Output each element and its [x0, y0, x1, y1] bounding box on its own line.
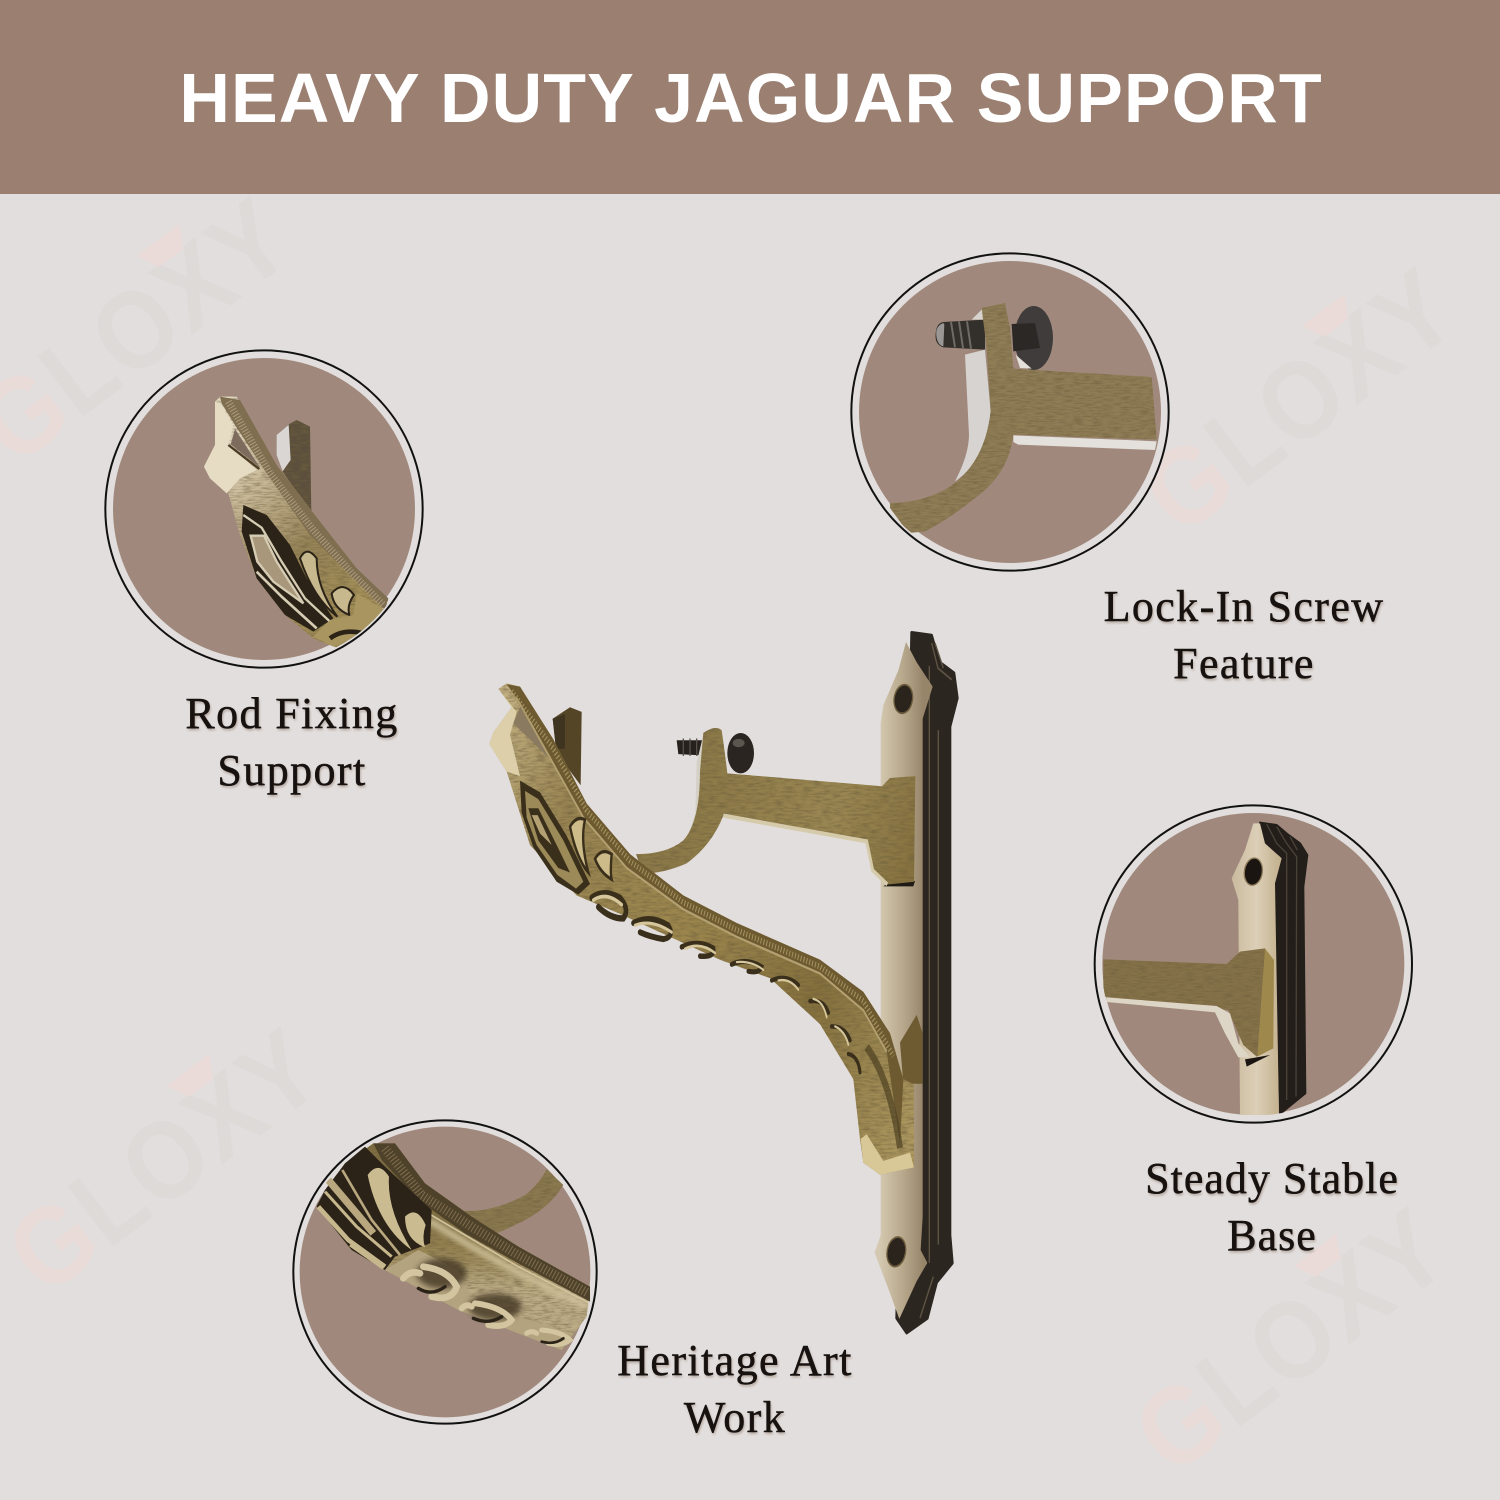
detail circle: heritage art work [293, 1120, 597, 1424]
main product: curtain bracket [489, 633, 957, 1333]
detail circle: steady stable base [1095, 805, 1412, 1123]
label: heritage art work: Heritage Art [617, 1336, 853, 1385]
watermark: GLOXY top right: GLOXY [1121, 245, 1478, 557]
header band [0, 0, 1500, 194]
label: heritage art work [617, 1336, 853, 1442]
lock screw [677, 733, 754, 773]
title: HEAVY DUTY JAGUAR SUPPORT [179, 59, 1323, 137]
label: heritage art work: Work [684, 1393, 786, 1442]
detail circle: rod fixing support [105, 350, 423, 668]
label: lock-in screw feature: Lock-In Screw [1104, 582, 1384, 631]
rod prong [553, 707, 582, 785]
decorative curved brace [489, 683, 914, 1175]
label: rod fixing support: Support [217, 746, 367, 795]
label: rod fixing support [185, 689, 399, 798]
label: lock-in screw feature: Feature [1173, 639, 1315, 688]
support arm and hook [636, 728, 915, 884]
watermark: GLOXY bottom right: GLOXY [1113, 1185, 1470, 1497]
label: rod fixing support: Rod Fixing [185, 689, 399, 738]
label: steady stable base [1145, 1154, 1399, 1260]
back plate layers [875, 633, 957, 1333]
label: steady stable base: Steady Stable [1145, 1154, 1399, 1203]
label: steady stable base: Base [1227, 1211, 1317, 1260]
label: lock-in screw feature [1104, 582, 1384, 688]
detail circle: lock-in screw [851, 253, 1169, 571]
